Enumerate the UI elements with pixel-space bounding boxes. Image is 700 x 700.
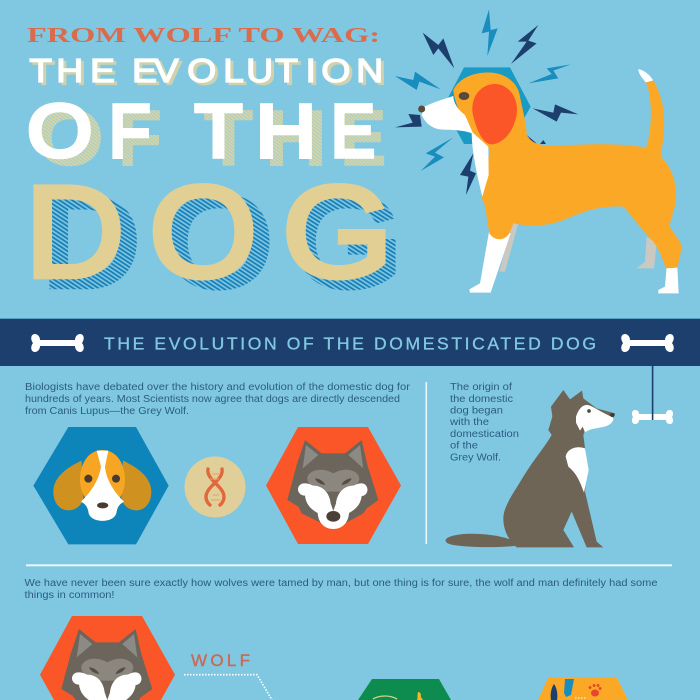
body <box>503 390 615 547</box>
white face <box>576 405 613 432</box>
common text: things in common! <box>24 590 114 601</box>
title: of the: T <box>205 97 252 180</box>
common text <box>24 578 658 601</box>
origin text: dog began <box>450 406 503 416</box>
title: of the: O <box>27 90 92 172</box>
origin text: the domestic <box>450 394 513 405</box>
near front leg <box>469 230 511 293</box>
nose <box>418 105 425 112</box>
title: dog: G <box>292 169 403 314</box>
lightning bolts <box>395 9 578 195</box>
origin text: Grey Wolf. <box>450 452 501 464</box>
icon: orange hexagon <box>538 678 628 700</box>
wolf face <box>287 440 378 529</box>
title: of the: O <box>37 97 102 179</box>
title: dog <box>25 159 403 315</box>
title: of the: E <box>341 97 385 179</box>
divider line vertical <box>426 382 427 544</box>
nose <box>97 502 108 508</box>
eye <box>459 92 469 100</box>
title: dog: D <box>25 160 125 305</box>
icon: right bone <box>621 334 674 352</box>
intro text: from Canis Lupus—the Grey Wolf. <box>25 406 189 417</box>
tail tip <box>638 69 653 83</box>
dog body <box>453 73 682 268</box>
icon: wolf face hexagon <box>266 427 401 544</box>
far legs <box>499 223 657 272</box>
origin text: of the <box>450 440 479 452</box>
title: from wolf to wag: FROM WOLF TO WAG: <box>27 23 380 47</box>
beagle illustration with lightning bolts <box>395 9 682 293</box>
white muzzle <box>422 96 473 134</box>
origin text: domestication <box>450 429 519 440</box>
title: dog: D <box>41 170 141 315</box>
head <box>80 450 125 508</box>
ear <box>472 84 517 144</box>
ears <box>53 461 151 510</box>
section banner <box>0 318 700 366</box>
divider line horizontal <box>26 564 672 566</box>
tail <box>446 534 515 547</box>
title: of the: F <box>119 98 160 180</box>
common text: We have never been sure exactly how wolves were tamed by man, but one thing is for sure, the wolf and man definitely had some <box>24 578 658 589</box>
title: of the: E <box>331 90 375 172</box>
title: the evolution: THE EVOLUTION <box>29 52 383 90</box>
blaze and muzzle <box>81 451 124 521</box>
wolf label: WOLF <box>191 651 250 670</box>
title: of the: T <box>195 90 242 173</box>
origin text: The origin of <box>450 382 512 393</box>
title: of the <box>27 90 385 180</box>
origin text <box>449 382 519 464</box>
wolf face lower <box>61 629 152 700</box>
title: dog: G <box>282 159 393 304</box>
icon: left bone <box>31 334 84 352</box>
hanging bone <box>632 366 673 424</box>
title: of the: H <box>266 97 326 179</box>
white chest <box>472 132 489 197</box>
title: the evolution: THE EVOLUTION <box>32 54 386 92</box>
title: dog: O <box>149 159 257 305</box>
intro text <box>25 382 411 417</box>
title: dog: O <box>165 169 273 315</box>
title: of the: H <box>256 90 316 172</box>
banner heading: THE EVOLUTION OF THE DOMESTICATED DOG <box>104 334 596 354</box>
origin text: with the <box>449 417 490 428</box>
white chest <box>566 447 589 493</box>
eye <box>587 409 591 413</box>
intro text: hundreds of years. Most Scientists now agree that dogs are directly descended <box>25 394 400 405</box>
blue hexagon behind head <box>443 67 531 144</box>
icon: wolf face hexagon lower <box>40 616 175 700</box>
near rear foot <box>658 267 679 293</box>
nose <box>610 413 615 417</box>
title: of the: F <box>109 91 150 173</box>
eyes <box>84 475 120 483</box>
illustration: sitting wolf <box>446 390 615 547</box>
icon: beagle face hexagon <box>33 427 169 544</box>
icon: dna circle <box>184 456 246 518</box>
intro text: Biologists have debated over the history and evolution of the domestic dog for <box>25 382 411 393</box>
icon: green hexagon <box>358 679 451 700</box>
dotted connector <box>184 675 272 700</box>
